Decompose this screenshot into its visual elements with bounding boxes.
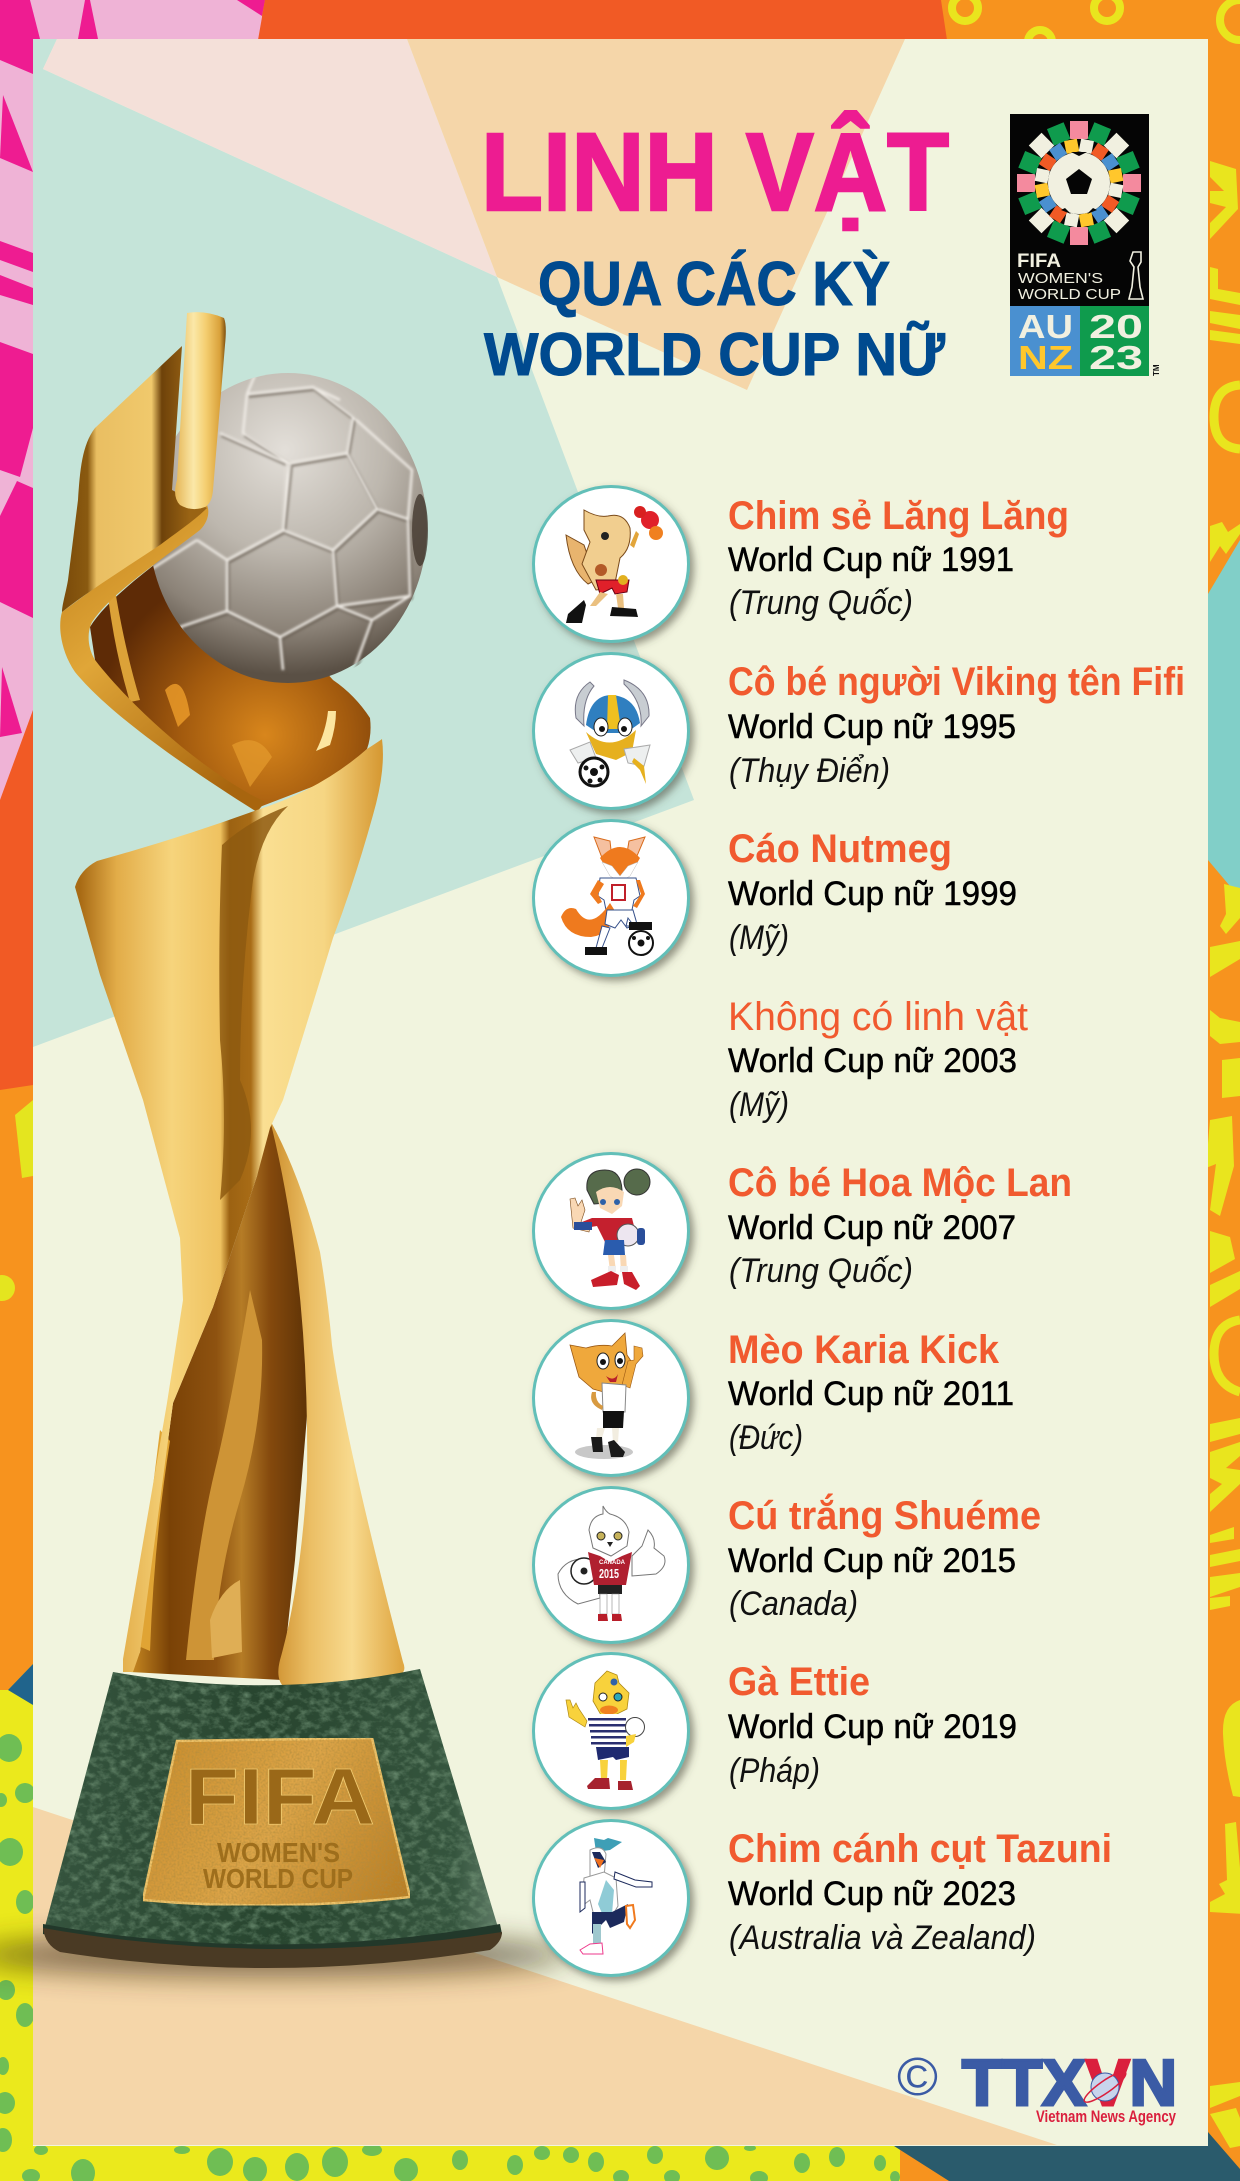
copyright symbol: © [897,2047,938,2107]
edition: World Cup nữ 2011 [728,1375,1014,1413]
mascot circle: Nutmeg [534,820,688,976]
mascot name: Chim sẻ Lăng Lăng [728,494,1069,538]
trophy ribbon cavity [90,530,371,808]
host: (Đức) [729,1419,803,1457]
host: (Trung Quốc) [729,584,913,622]
title [481,111,949,388]
mascot name: Gà Ettie [728,1660,870,1704]
mascot row: 1995 [534,654,1185,808]
mascot circle: Ettie [534,1654,688,1808]
row: 2003, no mascot [728,995,1028,1124]
mascot name: Cáo Nutmeg [728,827,952,871]
silver football [149,373,428,683]
TTXVN logo: Vietnam News Agency [1036,2107,1176,2126]
title line 1: LINH VẬT [481,111,949,234]
mascot row: 1991 [534,486,1069,642]
edition: World Cup nữ 1995 [728,708,1016,746]
FIFA Women's World Cup 2023 logo: WORLD CUP [1018,286,1121,303]
host: (Thụy Điển) [729,752,890,790]
mascot circle: Lăng Lăng [534,486,688,642]
marble base [43,1669,502,1968]
host: (Australia và Zealand) [729,1919,1036,1957]
mascot circle: Tazuni [534,1820,688,1976]
FIFA Women's World Cup 2023 logo: FIFA [1017,251,1061,272]
mascot name: Cú trắng Shuéme [728,1492,1041,1538]
mascot circle: Shuéme: CANADA [599,1560,626,1566]
mascot circle: Hoa Mộc Lan [534,1154,688,1308]
plate text women's world cup: WORLD CUP [203,1863,353,1894]
trophy stem, inner dark strand [130,1120,310,1680]
edition: World Cup nữ 2003 [728,1042,1017,1080]
plate text FIFA: FIFA [185,1752,375,1841]
FIFA Women's World Cup 2023 logo: 23 [1089,339,1143,376]
mascot name: Cô bé người Viking tên Fifi [728,660,1185,704]
FIFA Women's World Cup 2023 logo: 20 [1089,308,1143,345]
FIFA Women's World Cup 2023 logo: AU [1018,308,1073,345]
FIFA Women's World Cup 2023 logo [1010,114,1161,376]
trophy [0,312,570,1977]
mascot name: Mèo Karia Kick [728,1328,1000,1372]
host: (Canada) [729,1585,858,1623]
mascot row: 2011 [534,1320,1014,1476]
mascot circle: Karia [534,1320,688,1476]
edition: World Cup nữ 1991 [728,541,1014,579]
cavity highlights [108,590,336,787]
FIFA Women's World Cup 2023 logo: WOMEN'S [1018,270,1103,287]
mascot row: 1999 [534,820,1017,976]
trophy upper ribbon [62,346,207,612]
edition: World Cup nữ 2015 [728,1542,1016,1580]
mascot name: Cô bé Hoa Mộc Lan [728,1161,1072,1205]
funnel dark fold [219,806,288,1200]
FIFA Women's World Cup 2023 logo: TM [1152,364,1161,376]
host: (Mỹ) [729,1086,789,1124]
trophy stem, highlight streaks [136,1290,262,1660]
host: (Trung Quốc) [729,1252,913,1290]
mascot row: 2019 [534,1654,1017,1808]
host: (Pháp) [729,1752,820,1790]
gold plate [143,1738,410,1905]
mascot name: Chim cánh cụt Tazuni [728,1827,1112,1871]
plate text women's world cup: WOMEN'S [217,1837,340,1868]
no mascot label: Không có linh vật [728,995,1028,1039]
edition: World Cup nữ 2019 [728,1708,1017,1746]
title line 3: WORLD CUP NỮ [484,321,945,388]
mascot row: 2015 [534,1488,1041,1642]
host: (Mỹ) [729,919,789,957]
mascot circle: Shuéme: 2015 [599,1566,619,1581]
mascot row: 2023 [534,1820,1112,1976]
edition: World Cup nữ 2007 [728,1209,1016,1247]
FIFA Women's World Cup 2023 logo: NZ [1018,339,1073,376]
mascot row: 2007 [534,1154,1072,1308]
mascot circle: Fifi [534,654,688,808]
trophy lower funnel ribbon [75,739,383,1672]
ribbon gold lip [60,505,265,812]
trophy base shadow [0,1933,570,1977]
title line 2: QUA CÁC KỲ [538,250,890,319]
edition: World Cup nữ 1999 [728,875,1017,913]
trophy stem, right strand [270,1120,404,1688]
mascot circle: Shuéme [534,1488,688,1642]
TTXVN logo: TTXVN [962,2046,1177,2119]
edition: World Cup nữ 2023 [728,1875,1016,1913]
trophy top bar [175,312,226,509]
